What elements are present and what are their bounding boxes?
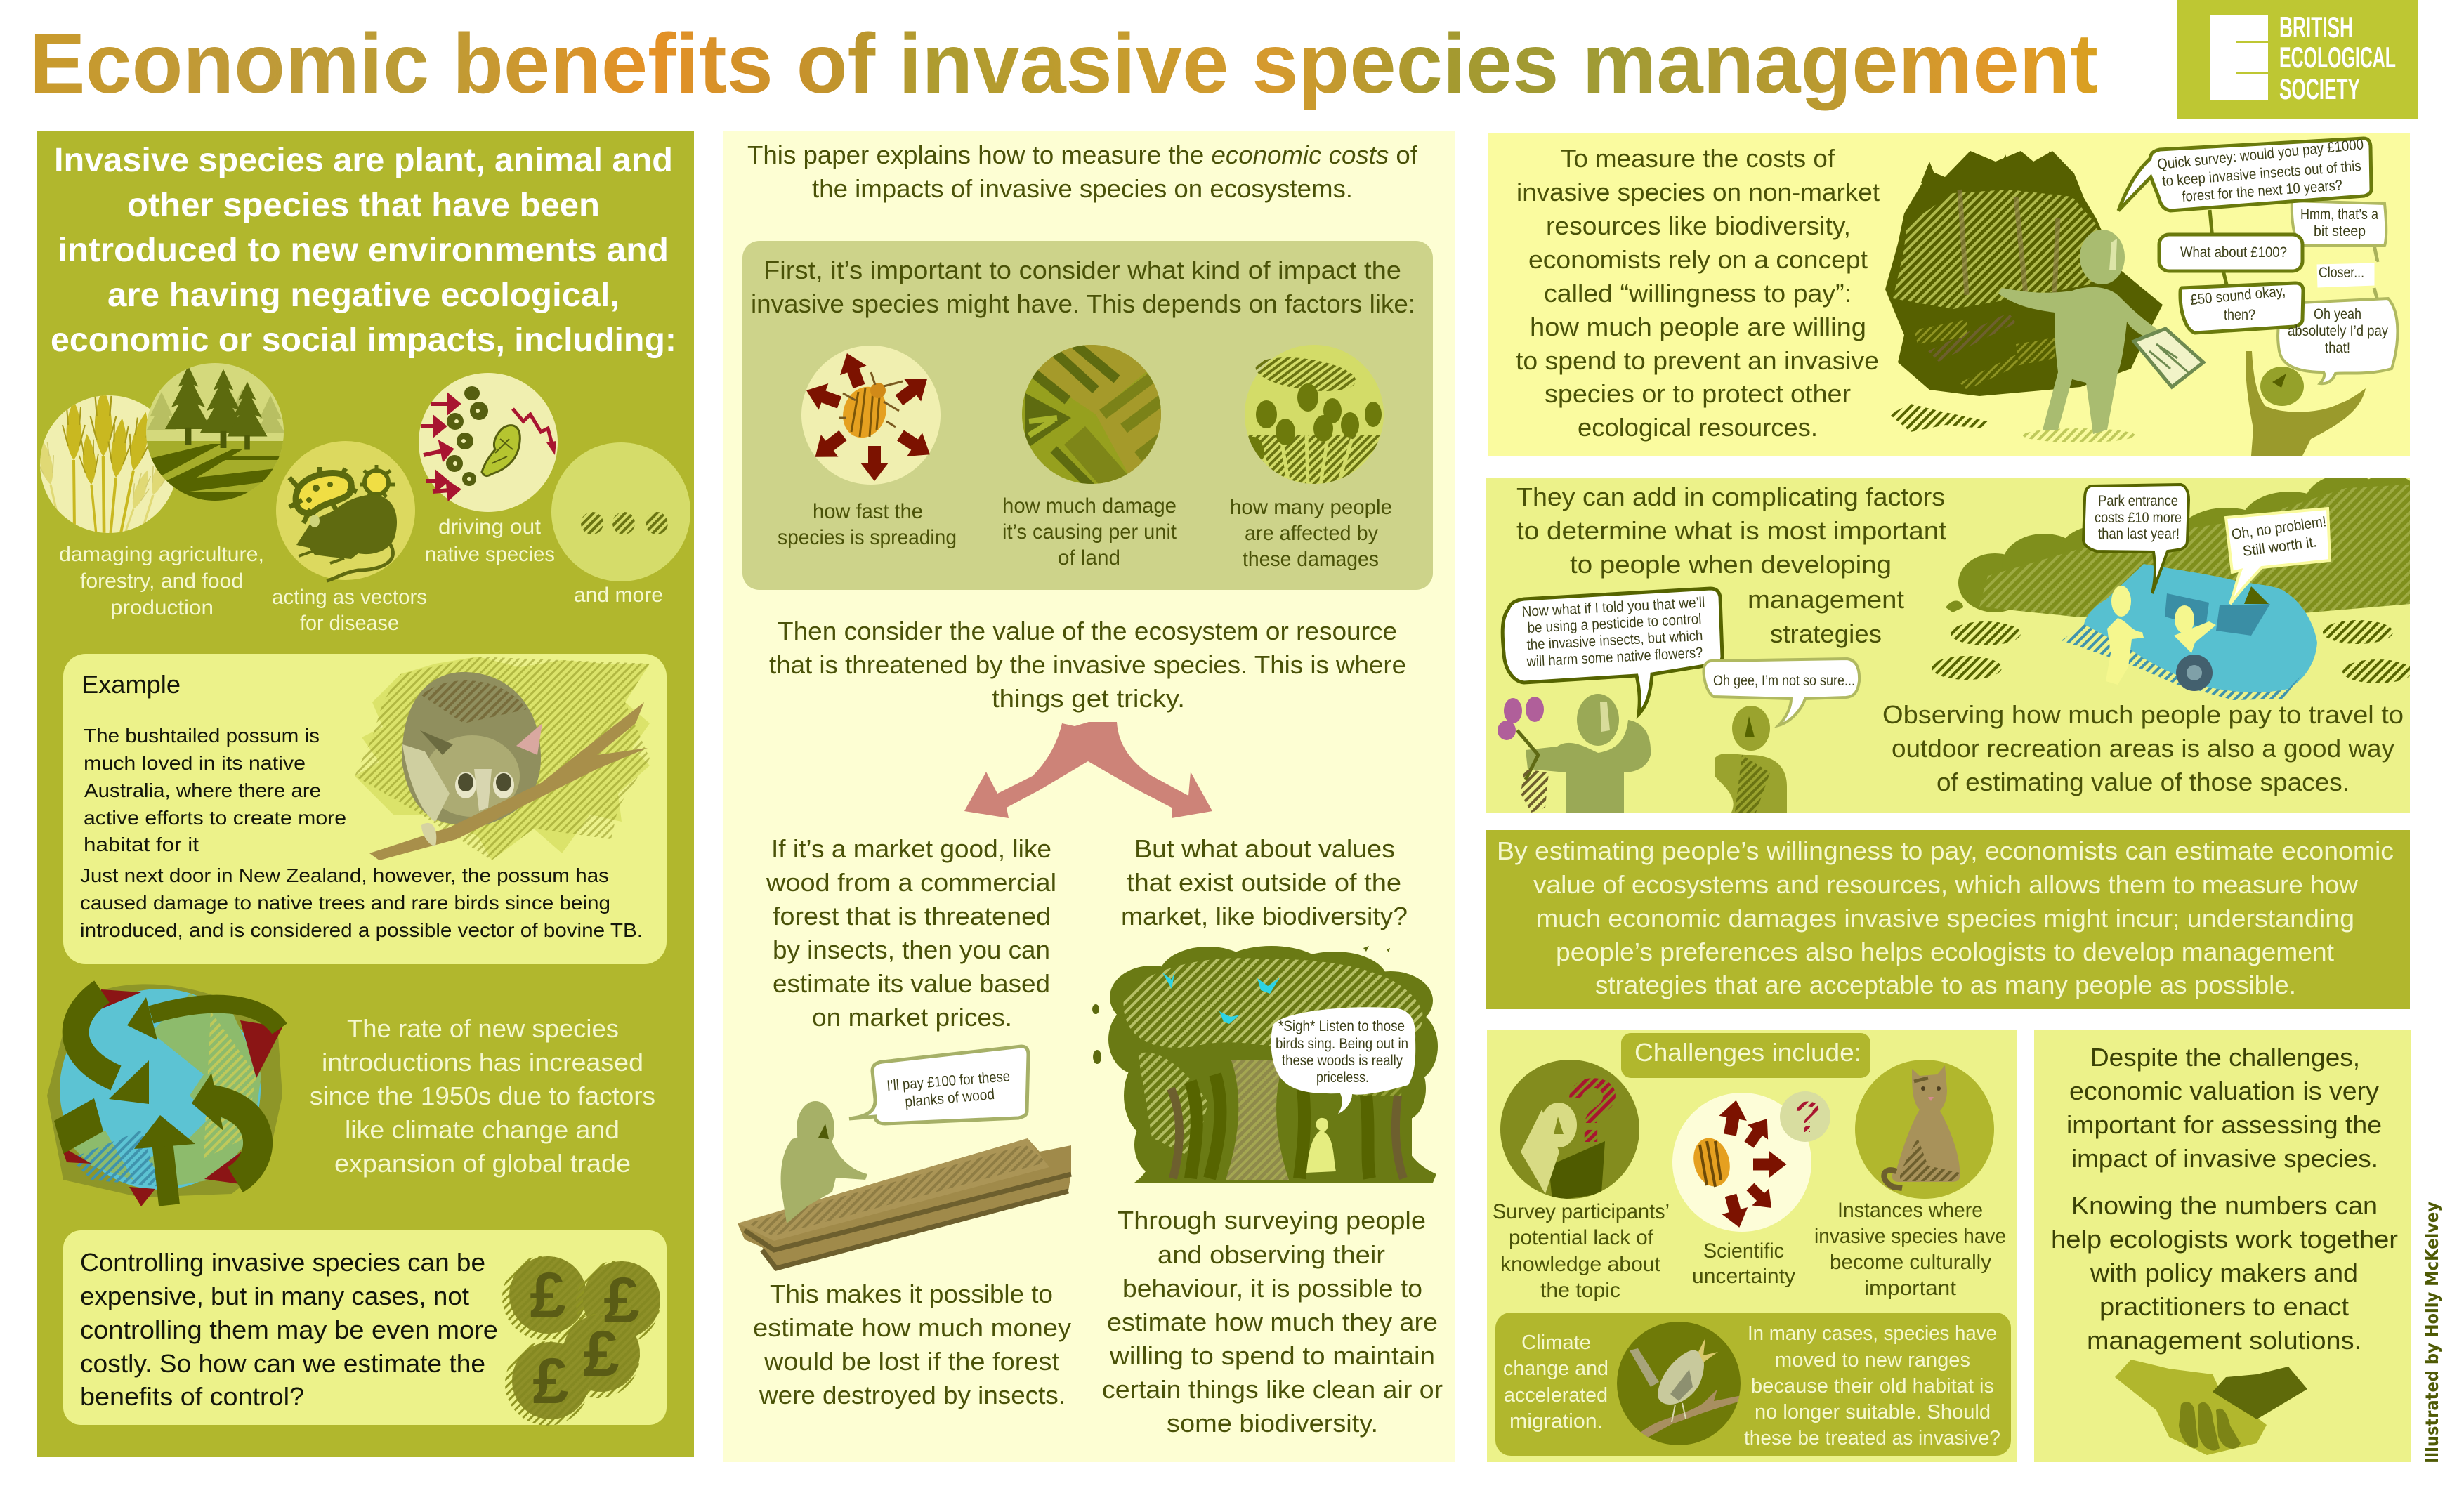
heading: definition: economic or social impacts, including:: [51, 322, 676, 359]
icon: scientific uncertainty circle: [1672, 1091, 1830, 1232]
panel: conclusion: Despite the challenges,: [2090, 1043, 2360, 1072]
example text: habitat for it: [84, 834, 199, 855]
box: climate change migration: because their old habitat is: [1751, 1375, 1994, 1397]
speech bubbles: park entrance: than last year!: [2098, 526, 2180, 542]
box: climate change migration: migration.: [1509, 1410, 1603, 1433]
box: impact factors: First, it’s important to consider what kind of impact the: [764, 256, 1401, 284]
text: willingness to pay: species or to protect other: [1545, 379, 1851, 408]
speech bubbles: survey conversation: forest for the next 10 years?: [2182, 177, 2343, 205]
text: value of ecosystem: Then consider the value of the ecosystem or resource: [778, 617, 1397, 645]
heading: challenges: [1621, 1033, 1870, 1078]
impact labels: [59, 515, 663, 635]
example text: introduced, and is considered a possible vector of bovine TB.: [80, 919, 643, 941]
illustration: person buying planks: [738, 1046, 1071, 1268]
challenge labels: become culturally: [1830, 1251, 1991, 1274]
text: possible loss: This makes it possible to: [770, 1280, 1053, 1308]
text: surveying people: some biodiversity.: [1167, 1409, 1378, 1438]
speech bubbles: park entrance: costs £10 more: [2095, 510, 2182, 526]
logo: British Ecological Society: SOCIETY: [2279, 72, 2360, 105]
panel: conclusion: management solutions.: [2087, 1326, 2361, 1355]
illustration: people with pesticide question: [1498, 694, 1787, 813]
box: cost of control: expensive, but in many cases, not: [80, 1282, 469, 1310]
challenge labels: Survey participants’: [1493, 1200, 1670, 1223]
text: complicating factors: strategies: [1770, 619, 1882, 648]
icon: handshake: [2115, 1360, 2307, 1455]
text: market good: wood from a commercial: [766, 868, 1056, 897]
text: rate of new species introductions: introductions has increased: [322, 1048, 643, 1077]
factor labels: it’s causing per unit: [1002, 520, 1177, 544]
panel: conclusion: impact of invasive species.: [2071, 1144, 2378, 1173]
icon: pound coins: £: [530, 1260, 566, 1331]
challenge labels: the topic: [1540, 1279, 1620, 1302]
factor labels: how fast the: [813, 500, 923, 523]
box: impact factors: [742, 241, 1433, 590]
challenge labels: important: [1864, 1277, 1957, 1300]
panel: conclusion: [2034, 1030, 2411, 1462]
speech bubble: planks: planks of wood: [904, 1086, 995, 1110]
challenge labels: Instances where: [1837, 1199, 1983, 1222]
text: surveying people: behaviour, it is possible to: [1122, 1274, 1422, 1303]
icon: damage per unit land: [1022, 345, 1161, 484]
panel: summary of willingness to pay: [1486, 830, 2410, 1009]
challenge labels: uncertainty: [1692, 1265, 1795, 1288]
text: willingness to pay: economists rely on a concept: [1528, 245, 1868, 274]
text: willingness to pay: invasive species on non-market: [1516, 178, 1880, 206]
intro text: This paper explains how to measure the economic costs of: [747, 140, 1418, 169]
illustration: possum on branch: [355, 657, 650, 860]
text: travel costs: outdoor recreation areas is also a good way: [1892, 734, 2394, 763]
box: climate change migration: accelerated: [1504, 1384, 1608, 1407]
panel: complicating factors: [1486, 474, 2423, 813]
heading: definition: introduced to new environments and: [58, 232, 669, 269]
panel: what are invasive species: [32, 131, 694, 1457]
text: non-market values: [1121, 834, 1408, 930]
speech bubbles: survey conversation: that!: [2325, 340, 2350, 356]
text: rate of new species introductions: [310, 1014, 655, 1178]
panel: willingness to pay: [1488, 133, 2410, 456]
text: surveying people: and observing their: [1158, 1240, 1385, 1269]
panel: conclusion: with policy makers and: [2090, 1258, 2358, 1287]
box: climate change migration: Climate: [1521, 1331, 1591, 1354]
text: market good: on market prices.: [812, 1003, 1012, 1032]
text: complicating factors: [1516, 482, 1946, 648]
text: travel costs: Observing how much people pay to travel to: [1882, 700, 2404, 729]
speech bubble: priceless: [1271, 1007, 1415, 1114]
text: travel costs: of estimating value of those spaces.: [1937, 768, 2350, 796]
icon: pound coins: [502, 1256, 660, 1426]
factor labels: how many people: [1230, 496, 1392, 519]
factor labels: [778, 494, 1392, 571]
speech bubbles: survey conversation: Hmm, that’s a: [2300, 206, 2378, 223]
panel: summary of willingness to pay: people’s preferences also helps ecologists to develop management: [1556, 938, 2334, 966]
box: impact factors: invasive species might have. This depends on factors like:: [751, 289, 1415, 318]
text: rate of new species introductions: The rate of new species: [347, 1014, 619, 1043]
text: willingness to pay: resources like biodiversity,: [1546, 211, 1851, 240]
speech bubbles: pesticide: the invasive insects, but which: [1526, 628, 1703, 653]
impact labels: and more: [574, 584, 663, 607]
text: possible loss: estimate how much money: [753, 1313, 1071, 1342]
logo: British Ecological Society: BRITISH: [2279, 11, 2353, 44]
speech bubbles: survey conversation: Closer...: [2319, 265, 2364, 281]
heading: definition: are having negative ecological,: [107, 277, 620, 314]
example text: Example: [81, 670, 181, 699]
box: cost of control: controlling them may be even more: [80, 1315, 498, 1344]
speech bubble: priceless: these woods is really: [1282, 1053, 1403, 1069]
box: cost of control: costly. So how can we estimate the: [80, 1349, 485, 1378]
speech bubbles: survey conversation: to keep invasive insects out of this: [2162, 158, 2362, 190]
challenge labels: knowledge about: [1500, 1253, 1661, 1276]
impact labels: forestry, and food: [80, 570, 243, 593]
icon: pound coins: £: [532, 1346, 569, 1417]
challenge labels: potential lack of: [1509, 1226, 1654, 1249]
text: rate of new species introductions: since the 1950s due to factors: [310, 1081, 655, 1110]
impact labels: for disease: [300, 612, 399, 635]
speech bubbles: survey conversation: £50 sound okay,: [2189, 283, 2286, 308]
example text: caused damage to native trees and rare birds since being: [80, 892, 610, 914]
challenge labels: [1493, 1199, 2006, 1302]
text: possible loss: [753, 1280, 1071, 1409]
text: rate of new species introductions: like climate change and: [345, 1115, 620, 1144]
text: willingness to pay: called “willingness to pay”:: [1544, 279, 1852, 308]
example text: active efforts to create more: [84, 807, 346, 829]
panel: conclusion: important for assessing the: [2066, 1110, 2382, 1139]
icon: wheat circle: [40, 395, 174, 533]
icon: participant confused circle: [1500, 1059, 1639, 1201]
icon: cat circle: [1855, 1060, 1994, 1199]
text: surveying people: Through surveying people: [1118, 1206, 1426, 1235]
impact labels: native species: [425, 543, 555, 566]
credit: illustrated by: Illustrated by Holly McKelvey: [2422, 1202, 2442, 1464]
box: cost of control: benefits of control?: [80, 1382, 304, 1411]
speech bubble: priceless: priceless.: [1316, 1070, 1369, 1086]
speech bubble: priceless: birds sing. Being out in: [1276, 1036, 1408, 1052]
text: willingness to pay: how much people are willing: [1530, 313, 1866, 341]
text: non-market values: But what about values: [1134, 834, 1395, 863]
box: cost of control: Controlling invasive species can be: [80, 1248, 485, 1277]
example text: [80, 670, 643, 941]
text: complicating factors: to determine what is most important: [1516, 516, 1946, 545]
icon: people affected: [1245, 345, 1384, 492]
speech bubbles: survey conversation: bit steep: [2314, 223, 2366, 239]
text: complicating factors: management: [1748, 585, 1904, 614]
speech bubbles: pesticide: Now what if I told you that we’ll: [1521, 594, 1705, 620]
text: surveying people: [1102, 1206, 1443, 1438]
impact labels: driving out: [438, 515, 542, 539]
example box: [63, 654, 667, 964]
speech bubbles: survey conversation: Oh yeah: [2314, 306, 2361, 322]
factor labels: species is spreading: [778, 526, 957, 549]
panel: measuring economic costs: [723, 131, 1455, 1462]
speech bubbles: pesticide: [1502, 588, 1859, 725]
text: surveying people: estimate how much they are: [1107, 1308, 1438, 1336]
impact labels: acting as vectors: [272, 586, 427, 609]
heading: definition: Invasive species are plant, animal and: [54, 142, 673, 179]
panel: conclusion: help ecologists work together: [2051, 1225, 2398, 1254]
panel: challenges: [1487, 1030, 2017, 1462]
text: willingness to pay: To measure the costs of: [1561, 144, 1835, 173]
impact labels: production: [110, 596, 214, 619]
speech bubbles: pesticide: be using a pesticide to control: [1527, 611, 1702, 636]
speech bubbles: park entrance: Oh, no problem!: [2230, 513, 2327, 543]
icon: native species displaced circle: [419, 373, 558, 512]
text: market good: by insects, then you can: [773, 935, 1050, 964]
speech bubbles: survey conversation: [2118, 136, 2397, 383]
text: non-market values: that exist outside of the: [1127, 868, 1401, 897]
example text: Just next door in New Zealand, however, the possum has: [80, 864, 609, 886]
speech bubbles: pesticide: will harm some native flowers?: [1526, 645, 1703, 670]
speech bubbles: park entrance: Still worth it.: [2242, 534, 2318, 560]
challenge labels: invasive species have: [1814, 1225, 2006, 1248]
arrow: forked pink arrow: [964, 722, 1212, 818]
icon: pound coins: £: [583, 1318, 620, 1390]
factor labels: of land: [1058, 546, 1120, 570]
example text: much loved in its native: [84, 752, 306, 774]
text: surveying people: certain things like clean air or: [1102, 1375, 1443, 1404]
factor labels: how much damage: [1002, 494, 1177, 518]
impact labels: damaging agriculture,: [59, 543, 264, 566]
box: climate change migration: change and: [1503, 1357, 1608, 1380]
box: climate change migration: these be treated as invasive?: [1744, 1427, 2000, 1449]
illustration: person in forest with birds: [1092, 946, 1438, 1183]
icon: and more circle: [551, 442, 690, 581]
intro text: the impacts of invasive species on ecosystems.: [812, 174, 1353, 203]
panel: conclusion: Knowing the numbers can: [2071, 1191, 2378, 1220]
icon: bird circle: [1617, 1322, 1742, 1445]
speech bubble: planks: I’ll pay £100 for these: [886, 1068, 1011, 1094]
speech bubbles: survey conversation: then?: [2224, 307, 2255, 323]
text: willingness to pay: ecological resources.: [1578, 413, 1818, 442]
icon: pound coins: £: [603, 1265, 640, 1336]
text: value of ecosystem: things get tricky.: [992, 684, 1185, 713]
text: market good: estimate its value based: [773, 969, 1050, 998]
text: market good: forest that is threatened: [773, 902, 1051, 930]
speech bubble: priceless: *Sigh* Listen to those: [1278, 1018, 1405, 1034]
text: complicating factors: to people when developing: [1570, 550, 1892, 579]
panel: conclusion: practitioners to enact: [2099, 1292, 2349, 1321]
text: possible loss: were destroyed by insects.: [759, 1381, 1066, 1409]
speech bubbles: pesticide: Oh gee, I’m not so sure...: [1713, 673, 1855, 689]
panel: summary of willingness to pay: value of ecosystems and resources, which allows them to measure how: [1533, 870, 2359, 899]
icon: scientific uncertainty circle: ?: [1795, 1093, 1821, 1142]
speech bubbles: survey conversation: Quick survey: would you pay £1000: [2156, 136, 2364, 173]
challenge labels: Scientific: [1703, 1239, 1784, 1263]
heading: challenges: Challenges include:: [1634, 1038, 1861, 1067]
icon: forest and fields circle: [140, 363, 288, 506]
text: non-market values: market, like biodiversity?: [1121, 902, 1408, 930]
text: value of ecosystem: [769, 617, 1406, 713]
speech bubbles: park entrance: Park entrance: [2098, 493, 2178, 509]
box: cost of control: [63, 1230, 667, 1426]
box: climate change migration: moved to new ranges: [1775, 1349, 1970, 1372]
factor labels: are affected by: [1245, 522, 1378, 545]
icon: rat and pathogens circle: [276, 441, 415, 581]
box: climate change migration: [1495, 1313, 2011, 1456]
box: climate change migration: In many cases, species have: [1748, 1322, 1997, 1345]
text: willingness to pay: to spend to prevent an invasive: [1516, 346, 1879, 375]
icon: participant confused circle: ?: [1565, 1059, 1620, 1162]
text: willingness to pay: [1516, 144, 1880, 442]
text: value of ecosystem: that is threatened by the invasive species. This is where: [769, 650, 1406, 679]
logo: British Ecological Society: [2177, 0, 2418, 119]
panel: summary of willingness to pay: By estimating people’s willingness to pay, economists can estimate economic: [1497, 836, 2394, 865]
panel: summary of willingness to pay: much economic damages invasive species might incur; understanding: [1536, 904, 2354, 933]
heading: definition: [51, 142, 676, 359]
title: Economic benefits of invasive species management: [30, 15, 2098, 111]
speech bubble: planks: [849, 1046, 1028, 1124]
text: surveying people: willing to spend to maintain: [1109, 1341, 1435, 1370]
text: complicating factors: They can add in complicating factors: [1516, 482, 1945, 511]
box: climate change migration: no longer suitable. Should: [1755, 1401, 1991, 1423]
illustration: surveyor and forest: [1885, 151, 2366, 456]
factor labels: these damages: [1243, 548, 1379, 571]
icon: globe with arrows: [47, 984, 282, 1206]
speech bubbles: survey conversation: What about £100?: [2180, 244, 2287, 261]
text: market good: If it’s a market good, like: [771, 834, 1051, 863]
text: rate of new species introductions: expansion of global trade: [334, 1149, 631, 1178]
speech bubbles: park entrance: [2083, 485, 2330, 604]
speech bubbles: survey conversation: absolutely I’d pay: [2288, 323, 2388, 339]
example text: Australia, where there are: [84, 780, 321, 801]
illustration: forest and car: [1932, 474, 2423, 700]
text: possible loss: would be lost if the forest: [764, 1347, 1059, 1376]
text: travel costs: [1882, 700, 2404, 796]
text: market good: [766, 834, 1056, 1032]
heading: definition: other species that have been: [127, 187, 600, 224]
panel: summary of willingness to pay: strategies that are acceptable to as many people as possible.: [1595, 971, 2296, 999]
intro text: [747, 140, 1418, 203]
icon: spreading beetle: [801, 346, 941, 485]
panel: conclusion: economic valuation is very: [2069, 1077, 2379, 1105]
example text: The bushtailed possum is: [84, 725, 320, 746]
